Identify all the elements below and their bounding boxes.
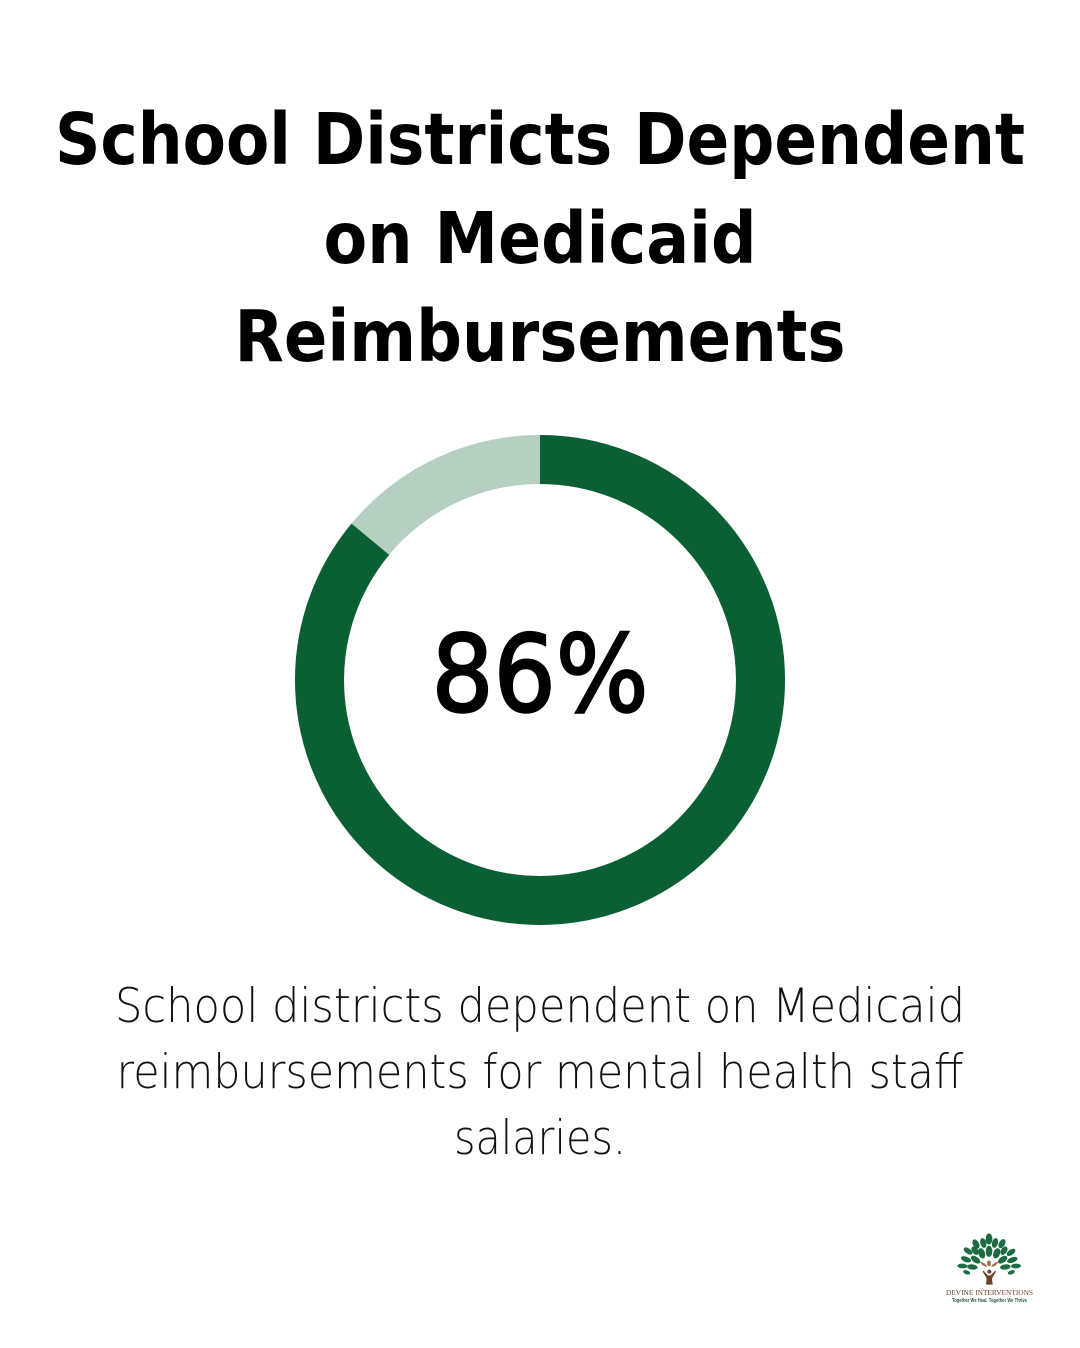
description text (115, 979, 965, 1166)
icon: tree (957, 1233, 1021, 1285)
title (55, 98, 1025, 378)
title: on Medicaid (324, 197, 756, 280)
logo tagline: Together We Heal. Together We Thrive (952, 1298, 1027, 1304)
percentage value: 86% (432, 613, 648, 736)
description text: School districts dependent on Medicaid (115, 979, 965, 1034)
description text: salaries. (454, 1111, 626, 1166)
logo name: DEVINE INTERVENTIONS (946, 1288, 1033, 1297)
logo: Devine Interventions (946, 1233, 1033, 1304)
donut chart: 86% (320, 460, 760, 900)
title: Reimbursements (234, 295, 846, 378)
description text: reimbursements for mental health staff (116, 1045, 964, 1100)
